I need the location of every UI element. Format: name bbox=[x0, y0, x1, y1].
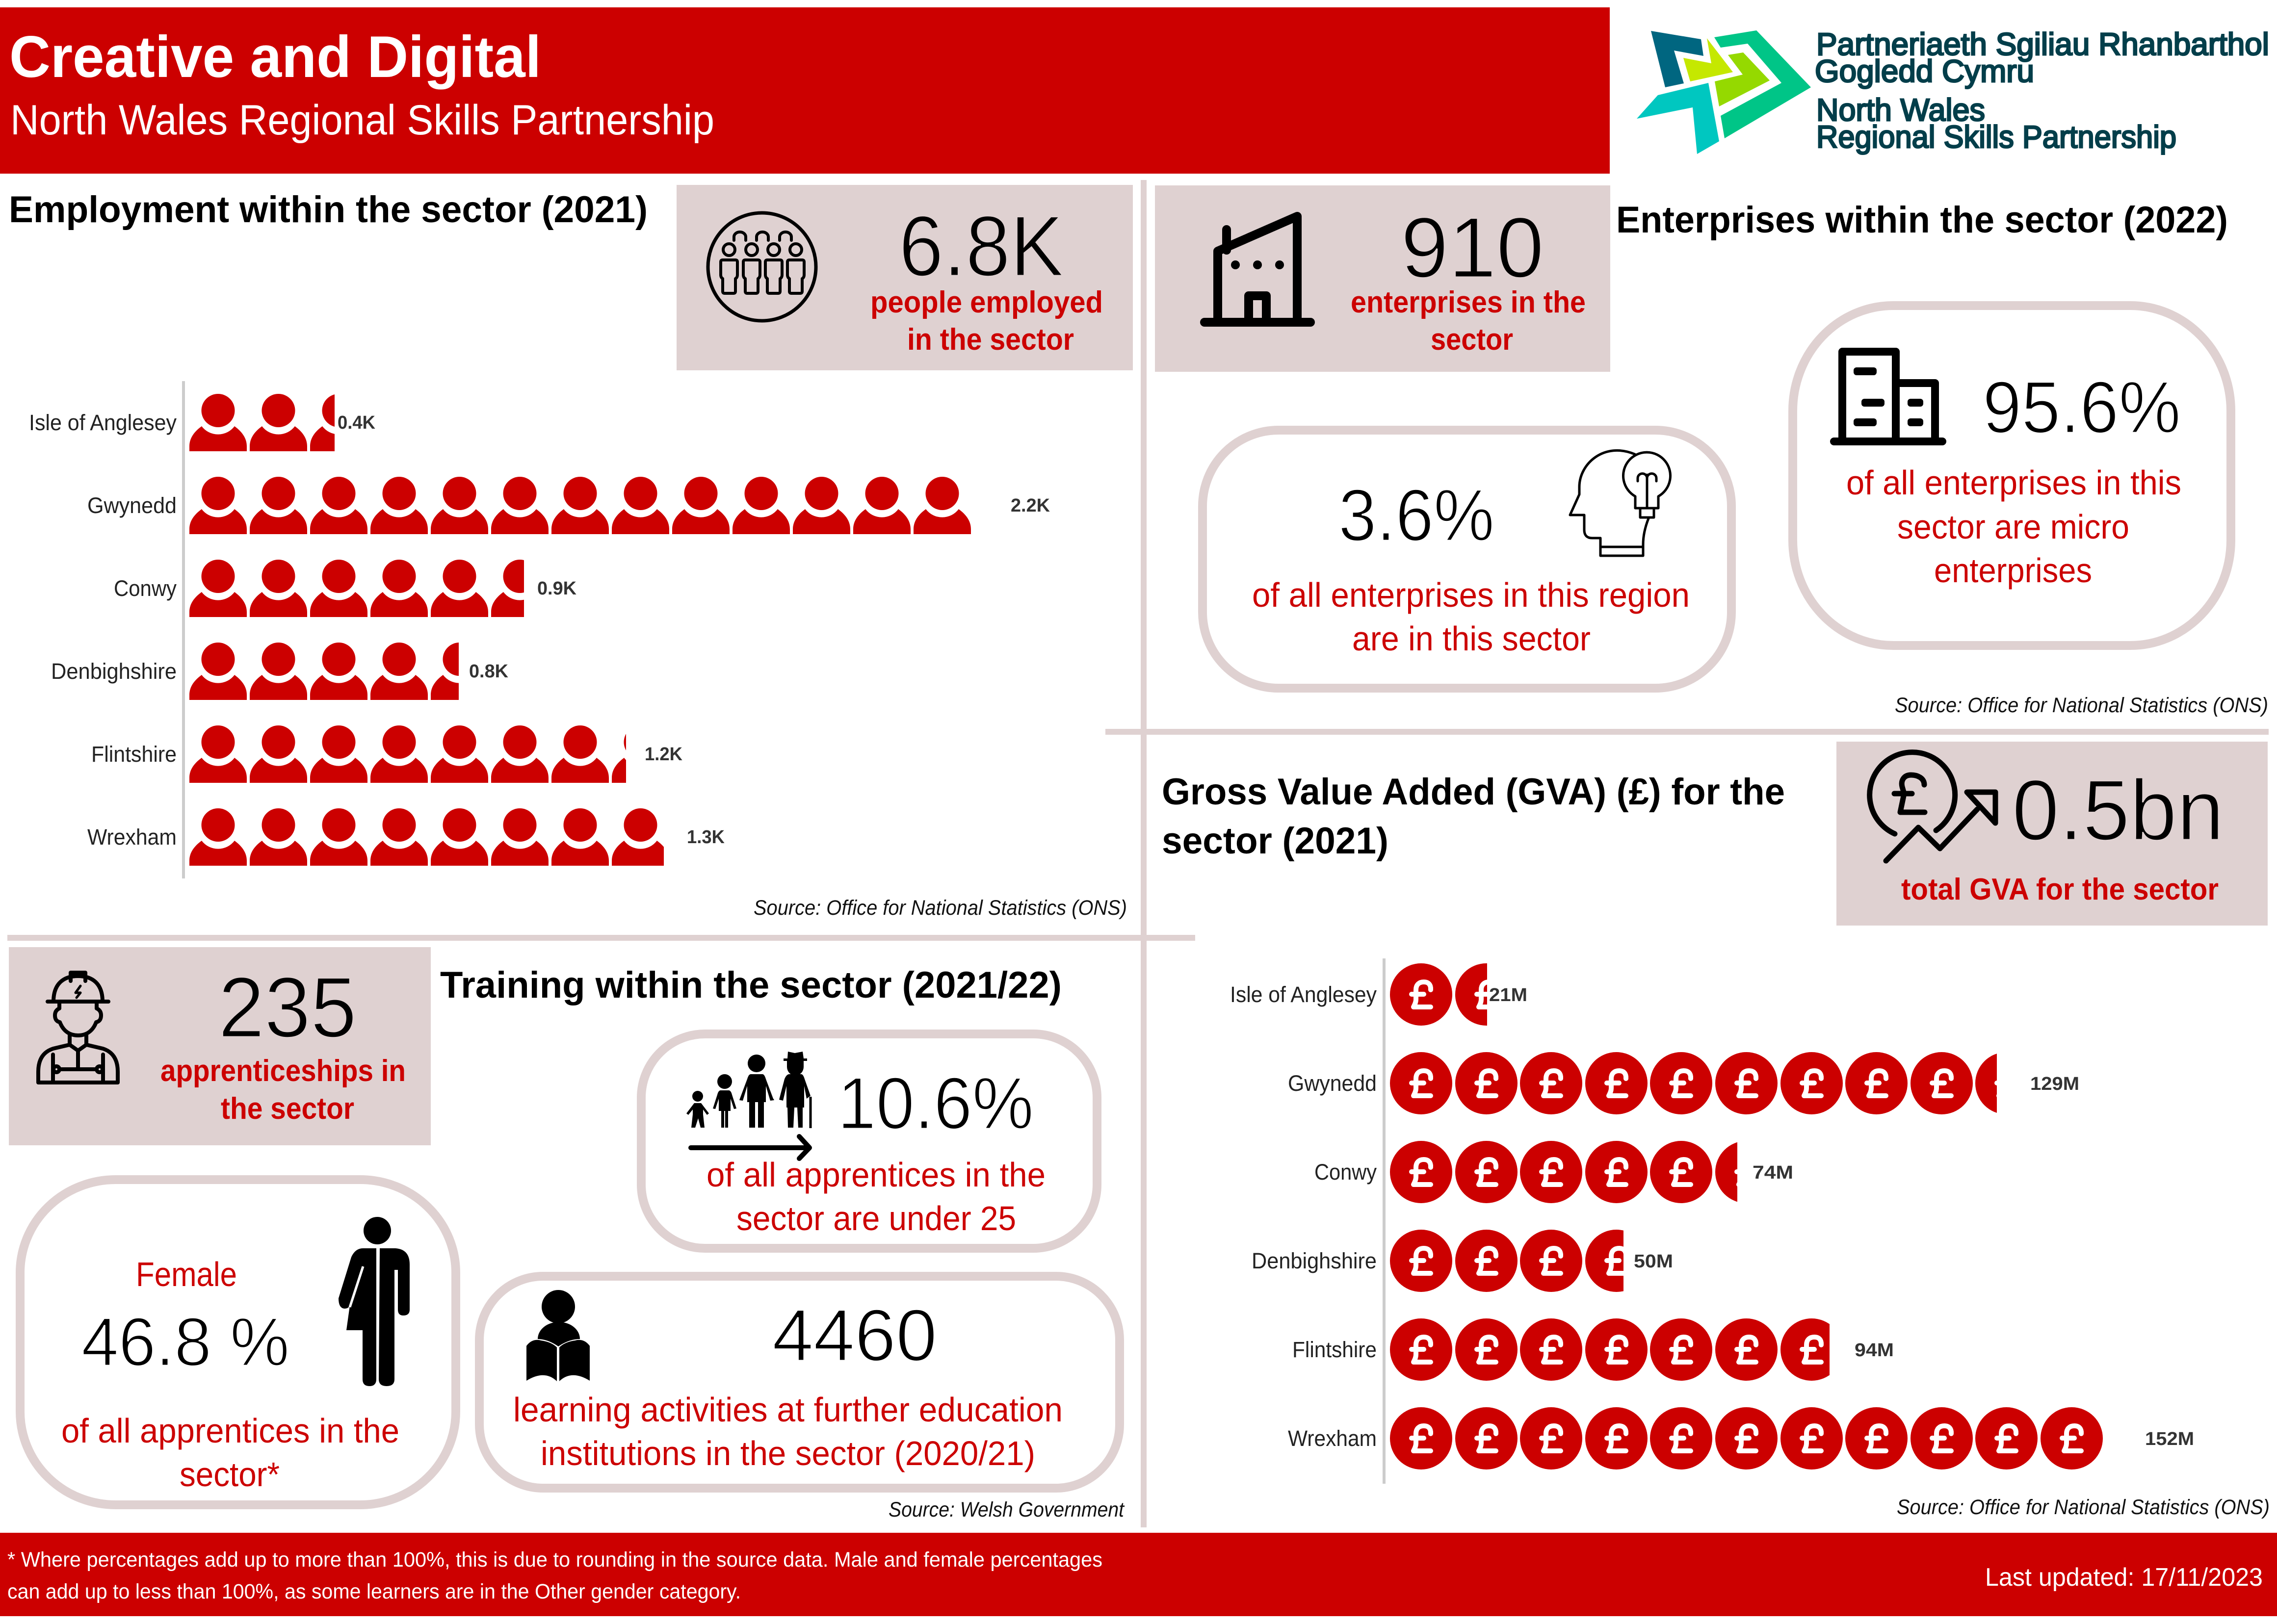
footnote bbox=[7, 1548, 1102, 1603]
heading: GVA: Gross Value Added (GVA) (£) for the bbox=[1162, 771, 1785, 813]
stat label: of all enterprises in this bbox=[1846, 464, 2181, 502]
stat: 46.8 %: 46.8 % bbox=[81, 1303, 289, 1380]
callout: apprentices under 25 bbox=[641, 1034, 1097, 1248]
stat: 6.8K: 6.8K bbox=[899, 199, 1064, 294]
chart: employment by county bbox=[29, 381, 1050, 878]
row: Flintshire: 94M bbox=[1855, 1340, 1894, 1361]
heading: GVA: sector (2021) bbox=[1162, 820, 1388, 862]
panel: apprenticeships bbox=[9, 947, 431, 1145]
stat: 95.6%: 95.6% bbox=[1983, 366, 2181, 448]
stat label: sector bbox=[1431, 323, 1513, 357]
panel: people employed bbox=[677, 185, 1133, 370]
source: training: Source: Welsh Government bbox=[889, 1498, 1125, 1521]
footer bbox=[0, 1533, 2277, 1616]
row: Denbighshire: 50M bbox=[1634, 1251, 1673, 1272]
icon: ages of people with arrow bbox=[686, 1052, 811, 1159]
stat label bbox=[870, 285, 1103, 357]
stat label bbox=[1351, 285, 1586, 357]
row: Wrexham bbox=[1288, 1407, 2194, 1469]
row: Denbighshire bbox=[51, 643, 509, 700]
icon: person reading bbox=[526, 1290, 590, 1381]
stat label: in the sector bbox=[907, 323, 1074, 357]
row: Isle of Anglesey bbox=[1230, 963, 1527, 1026]
icon: building bbox=[1204, 216, 1310, 322]
stat: 3.6%: 3.6% bbox=[1338, 474, 1494, 556]
row: Wrexham: 152M bbox=[2145, 1429, 2194, 1449]
row: Isle of Anglesey: Isle of Anglesey bbox=[1230, 982, 1377, 1007]
stat label: are in this sector bbox=[1352, 619, 1591, 658]
stat label: of all apprentices in the bbox=[707, 1156, 1046, 1194]
stat: 235: 235 bbox=[218, 960, 357, 1056]
stat heading: Female bbox=[136, 1255, 237, 1293]
stat label bbox=[160, 1054, 406, 1126]
stat: 10.6%: 10.6% bbox=[838, 1062, 1034, 1144]
stat label bbox=[61, 1412, 399, 1494]
row: Isle of Anglesey: Isle of Anglesey bbox=[29, 410, 177, 435]
stat label: sector are under 25 bbox=[736, 1199, 1016, 1237]
row: Gwynedd bbox=[87, 477, 1050, 534]
stat label: of all apprentices in the bbox=[61, 1412, 399, 1450]
stat label: the sector bbox=[221, 1092, 354, 1126]
heading: training: Training within the sector (2021/22) bbox=[440, 964, 1062, 1006]
chart: GVA by county bbox=[1230, 958, 2194, 1484]
subtitle: North Wales Regional Skills Partnership bbox=[10, 97, 714, 144]
icon: group of people bbox=[708, 213, 816, 321]
stat label: enterprises bbox=[1934, 551, 2092, 590]
row: Flintshire bbox=[1292, 1318, 1894, 1381]
row: Isle of Anglesey: 0.4K bbox=[338, 412, 376, 433]
stat label: learning activities at further education bbox=[513, 1391, 1063, 1429]
logo text bbox=[1815, 26, 2269, 155]
row: Denbighshire: Denbighshire bbox=[1252, 1248, 1377, 1273]
stat label: sector* bbox=[180, 1455, 280, 1494]
footnote: can add up to less than 100%, as some learners are in the Other gender category. bbox=[7, 1580, 741, 1603]
row: Conwy bbox=[114, 560, 577, 617]
icon: worker with helmet bbox=[38, 973, 118, 1083]
icon: gender figure bbox=[339, 1217, 410, 1386]
row: Isle of Anglesey bbox=[29, 394, 376, 451]
panel: total GVA bbox=[1836, 742, 2268, 926]
stat: 4460: 4460 bbox=[772, 1294, 937, 1376]
row: Wrexham: Wrexham bbox=[87, 825, 177, 850]
stat label bbox=[513, 1391, 1063, 1472]
row: Gwynedd: 2.2K bbox=[1011, 495, 1050, 516]
callout: 95.6% micro enterprises bbox=[1793, 306, 2231, 645]
stat label bbox=[1252, 576, 1690, 658]
row: Flintshire: Flintshire bbox=[1292, 1337, 1377, 1362]
header banner bbox=[0, 7, 1610, 174]
callout: female apprentices bbox=[20, 1180, 456, 1505]
title: Creative and Digital bbox=[9, 24, 541, 90]
stat: 0.5bn: 0.5bn bbox=[2012, 763, 2224, 858]
stat label bbox=[707, 1156, 1046, 1237]
row: Wrexham bbox=[87, 808, 725, 866]
stat label: institutions in the sector (2020/21) bbox=[541, 1434, 1035, 1472]
row: Flintshire bbox=[91, 725, 683, 783]
heading: GVA bbox=[1162, 771, 1785, 862]
heading: employment: Employment within the sector (2021) bbox=[9, 189, 648, 231]
row: Isle of Anglesey: 21M bbox=[1489, 985, 1527, 1005]
last updated: Last updated: 17/11/2023 bbox=[1985, 1563, 2263, 1592]
heading: enterprises: Enterprises within the sector (2022) bbox=[1616, 199, 2228, 241]
logo text: Gogledd Cymru bbox=[1815, 53, 2034, 89]
footnote: * Where percentages add up to more than 100%, this is due to rounding in the source data. Male and female percentages bbox=[7, 1548, 1102, 1572]
stat label: of all enterprises in this region bbox=[1252, 576, 1690, 614]
callout: 3.6% of region bbox=[1203, 430, 1731, 688]
source: employment: Source: Office for National Statistics (ONS) bbox=[754, 896, 1127, 920]
stat: 910: 910 bbox=[1401, 200, 1544, 296]
row: Conwy: Conwy bbox=[1314, 1160, 1377, 1185]
row: Denbighshire: 0.8K bbox=[469, 661, 509, 682]
row: Conwy: 74M bbox=[1753, 1162, 1793, 1183]
row: Gwynedd: Gwynedd bbox=[87, 493, 177, 518]
stat label: enterprises in the bbox=[1351, 285, 1586, 319]
stat label bbox=[1846, 464, 2181, 590]
row: Conwy: Conwy bbox=[114, 576, 177, 601]
row: Flintshire: 1.2K bbox=[645, 744, 683, 765]
row: Gwynedd: Gwynedd bbox=[1288, 1071, 1377, 1096]
logo bbox=[1637, 26, 2269, 155]
logo text: Regional Skills Partnership bbox=[1816, 119, 2176, 155]
row: Gwynedd bbox=[1288, 1052, 2079, 1114]
row: Conwy: 0.9K bbox=[537, 578, 577, 599]
row: Wrexham: 1.3K bbox=[687, 827, 725, 848]
logo mark bbox=[1637, 30, 1811, 154]
stat label: apprenticeships in bbox=[160, 1054, 406, 1088]
icon: head with light bulb bbox=[1570, 450, 1671, 556]
row: Denbighshire bbox=[1252, 1230, 1673, 1292]
stat label: people employed bbox=[870, 285, 1103, 319]
row: Conwy bbox=[1314, 1141, 1793, 1203]
stat label: total GVA for the sector bbox=[1901, 873, 2219, 906]
icon: pound with rising arrow bbox=[1870, 752, 1995, 861]
row: Flintshire: Flintshire bbox=[91, 742, 177, 767]
logo text: North Wales bbox=[1816, 92, 1985, 128]
logo text: Partneriaeth Sgiliau Rhanbarthol bbox=[1816, 26, 2269, 62]
icon: office buildings bbox=[1834, 352, 1942, 441]
stat label: sector are micro bbox=[1897, 508, 2129, 546]
row: Denbighshire: Denbighshire bbox=[51, 659, 177, 684]
panel: enterprises bbox=[1155, 185, 1610, 372]
row: Gwynedd: 129M bbox=[2030, 1074, 2079, 1094]
row: Wrexham: Wrexham bbox=[1288, 1426, 1377, 1451]
callout: learning activities bbox=[479, 1276, 1120, 1488]
